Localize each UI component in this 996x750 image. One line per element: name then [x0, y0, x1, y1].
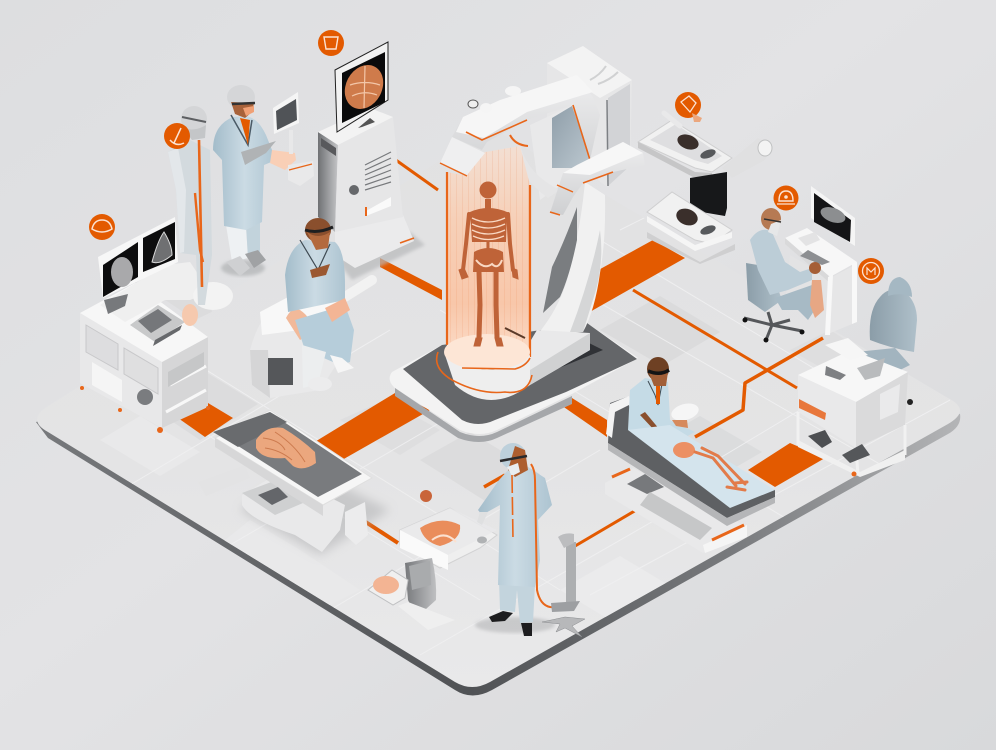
foot pedal stand: [542, 533, 585, 637]
figure: seated clinician with patient on bed: [605, 357, 775, 553]
panel: left workstation cart: [80, 217, 212, 433]
white device behind cart: [100, 262, 212, 322]
imaging bed platform: [605, 468, 747, 553]
panel: bed with brain: [198, 410, 390, 555]
cable: [531, 464, 562, 608]
figure: standing clinician in back: [168, 106, 233, 310]
robot arm: [722, 138, 772, 178]
icon: helmet badge: [774, 186, 798, 210]
scanner base plate: [390, 323, 638, 442]
legs: [226, 225, 248, 262]
scanner glass cylinder: [437, 146, 532, 400]
icon: tool badge: [164, 123, 190, 149]
cart body: [80, 283, 210, 433]
connector: orange floor strips: [178, 158, 825, 549]
panel: specimen table: [368, 490, 497, 630]
figure: standing clinician with tablet: [213, 85, 314, 276]
dark panel: [690, 172, 727, 216]
keypad on cart: [130, 305, 185, 346]
patient skeleton overlay: [673, 442, 747, 490]
monitor: [358, 118, 375, 128]
torso: [628, 378, 695, 440]
bed frame: [215, 410, 372, 505]
monitor stand: [104, 294, 128, 314]
figure: seated clinician with patient arm: [250, 218, 372, 398]
patient on chair: [295, 305, 354, 365]
pillow: [213, 412, 287, 447]
scanner front head: [440, 137, 485, 176]
head: [227, 85, 255, 109]
office chair: [742, 263, 804, 342]
panel: operator desk: [742, 186, 917, 477]
specimen pod: [405, 558, 436, 609]
hand and glove: [477, 512, 488, 525]
tablet: [241, 141, 276, 165]
torso: [285, 240, 345, 312]
trousers: [499, 580, 535, 623]
lab coat: [213, 116, 276, 230]
bed base: [198, 465, 368, 552]
icon: cap badge: [89, 214, 115, 240]
scanner C clamp: [510, 135, 560, 198]
control cart: [798, 338, 913, 477]
panel: ceiling scanners right: [638, 113, 772, 264]
twin monitors: [98, 217, 178, 298]
scanner side arm: [550, 142, 645, 215]
small specimen: [420, 490, 432, 502]
recliner: [608, 397, 775, 518]
console base: [335, 215, 414, 268]
panel: tall console with brain scan: [318, 42, 425, 280]
floor platform: [36, 218, 960, 696]
panel: central scanner: [390, 75, 645, 442]
lower scanner tray: [647, 192, 735, 264]
head: [305, 218, 331, 242]
clear tray cart: [400, 508, 497, 568]
icon: head badge: [858, 258, 884, 284]
head: [647, 357, 669, 381]
console body: [318, 132, 338, 232]
head: [500, 443, 526, 469]
shoes: [489, 611, 513, 622]
panel: back scanner cabinet: [547, 46, 632, 187]
seated operator: [750, 208, 824, 320]
treatment chair: [250, 280, 372, 398]
upper scanner tray: [638, 113, 732, 178]
blanket: [628, 425, 775, 508]
brain: [256, 428, 316, 468]
mattress: [224, 414, 362, 497]
floor tiles: [132, 218, 950, 617]
skeleton figure: [459, 182, 518, 346]
patient chair: [856, 277, 917, 375]
scanner rear column: [525, 105, 605, 385]
scanner pedestal: [445, 355, 530, 400]
figure: clinician in front: [475, 443, 585, 637]
icon: brain lamp badge: [675, 92, 702, 122]
desk: [785, 228, 857, 335]
hand and tray: [270, 150, 296, 170]
small monitor: [289, 130, 293, 154]
scanner upper arm: [440, 75, 600, 175]
icon: monitor badge: [318, 30, 344, 56]
monitor: [811, 186, 855, 246]
coat: [478, 465, 552, 587]
